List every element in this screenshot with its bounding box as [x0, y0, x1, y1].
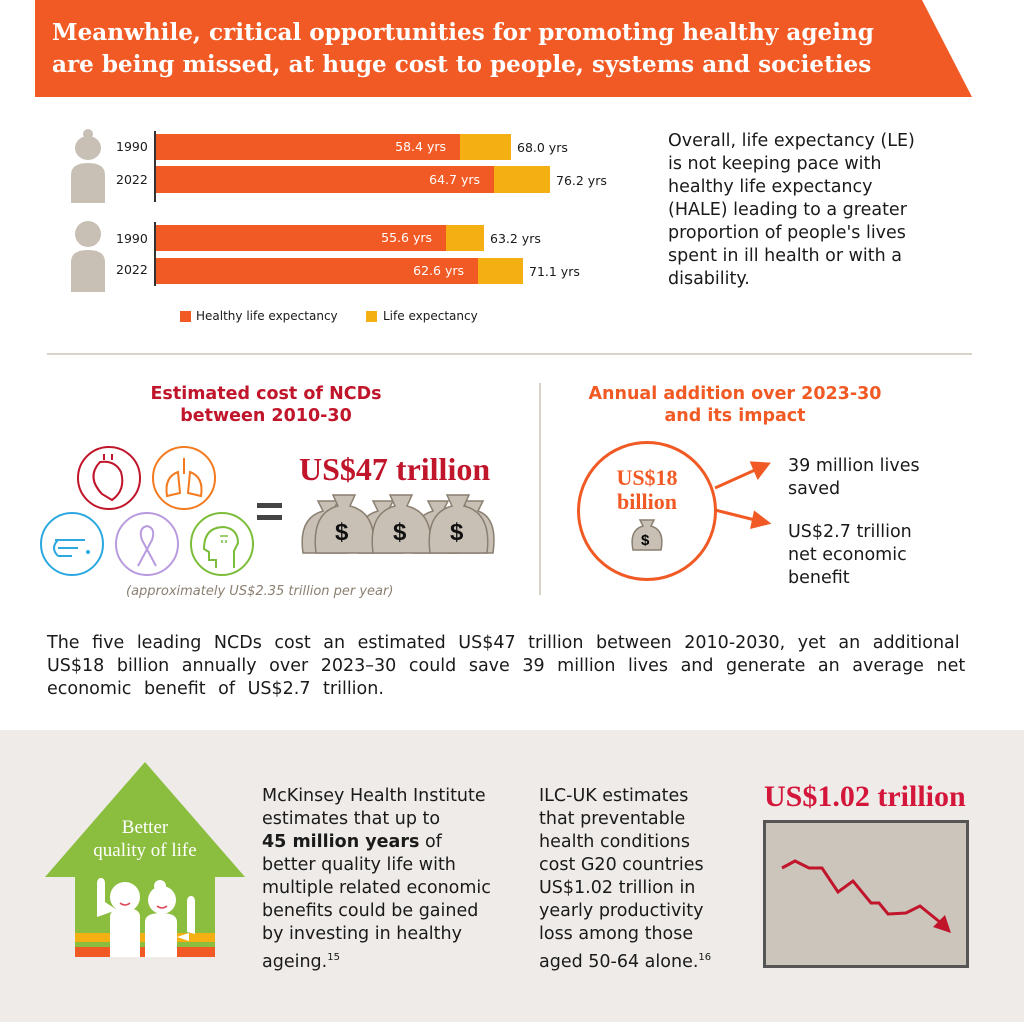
- outcomes text: saved: [788, 479, 840, 499]
- text: McKinsey: better quality life with: [262, 855, 456, 875]
- bar chart: HALE vs LE: 1990: [116, 231, 148, 246]
- text: McKinsey: 45 million years of: [262, 832, 442, 852]
- panel: annual addition: net economic: [788, 545, 907, 565]
- bar chart: HALE vs LE: 68.0 yrs: [517, 140, 568, 155]
- legend: [180, 309, 478, 323]
- text: ILC-UK: ILC-UK estimates: [539, 786, 688, 806]
- icon: money bags: $: [335, 519, 349, 546]
- text: LE vs HALE explanation: (HALE) leading to a greater: [668, 200, 907, 220]
- legend: Life expectancy: [383, 309, 478, 323]
- panel: annual addition: US$2.7 trillion: [788, 522, 912, 542]
- bar chart: HALE vs LE: 1990: [116, 139, 148, 154]
- outcomes text: 39 million lives: [788, 456, 920, 476]
- text: McKinsey: ageing.15: [262, 952, 340, 972]
- text: ILC-UK: yearly productivity: [539, 901, 703, 921]
- bar chart: HALE vs LE: 2022: [116, 172, 148, 187]
- bar chart: HALE vs LE: 71.1 yrs: [529, 264, 580, 279]
- text: ILC-UK: that preventable: [539, 809, 685, 829]
- icon: money bags: $: [450, 519, 464, 546]
- text: McKinsey: benefits could be gained: [262, 901, 478, 921]
- text: LE vs HALE explanation: spent in ill health or with a: [668, 246, 902, 266]
- panel: annual addition: benefit: [788, 568, 850, 588]
- text: McKinsey: by investing in healthy: [262, 924, 462, 944]
- bar chart: HALE vs LE: 2022: [116, 262, 148, 277]
- text: McKinsey: [262, 786, 491, 972]
- circle: US$18 billion: $: [641, 532, 650, 549]
- equals sign: [257, 503, 282, 508]
- text: ILC-UK: [539, 786, 711, 972]
- panel: bottom grey: [0, 730, 1024, 1022]
- text: ILC-UK: aged 50-64 alone.16: [539, 952, 711, 972]
- circle: US$18 billion: [577, 441, 717, 581]
- summary text: US$18 billion annually over 2023–30 could save 39 million lives and generate an average net: [47, 656, 965, 676]
- text: ILC-UK: health conditions: [539, 832, 690, 852]
- summary text: [46, 633, 965, 699]
- heading: Annual addition over 2023-30: [589, 384, 881, 404]
- icon: house better quality of life: quality of life: [93, 840, 197, 861]
- circle: US$18 billion: billion: [617, 489, 677, 514]
- bar chart: HALE vs LE: [71, 129, 607, 323]
- heading: [150, 384, 382, 426]
- heading: and its impact: [664, 406, 806, 426]
- icon: money bags: [301, 494, 495, 554]
- text: LE vs HALE explanation: disability.: [668, 269, 750, 289]
- chart: declining line: [763, 820, 969, 968]
- icon: house better quality of life: Better: [122, 817, 169, 838]
- bar chart: HALE vs LE: 76.2 yrs: [556, 173, 607, 188]
- text: LE vs HALE explanation: is not keeping pace with: [668, 154, 881, 174]
- bar chart: HALE vs LE: 55.6 yrs: [381, 230, 432, 245]
- bar chart: HALE vs LE: 62.6 yrs: [413, 263, 464, 278]
- icon: house better quality of life: [45, 762, 245, 957]
- text: LE vs HALE explanation: healthy life expectancy: [668, 177, 872, 197]
- US$47 trillion: US$47 trillion: [299, 451, 490, 487]
- legend: Healthy life expectancy: [196, 309, 338, 323]
- icon: money bags: $: [393, 519, 407, 546]
- heading: [588, 384, 881, 426]
- summary text: The five leading NCDs cost an estimated US$47 trillion between 2010-2030, yet an additional: [47, 633, 960, 653]
- text: ILC-UK: loss among those: [539, 924, 693, 944]
- icons: five NCDs: [40, 446, 254, 576]
- text: McKinsey: estimates that up to: [262, 809, 440, 829]
- text: McKinsey: multiple related economic: [262, 878, 491, 898]
- text: LE vs HALE explanation: Overall, life expectancy (LE): [668, 131, 915, 151]
- text: LE vs HALE explanation: [668, 131, 915, 289]
- icon: man: [71, 221, 105, 292]
- caption: (approximately US$2.35 trillion per year): [126, 584, 393, 599]
- text: LE vs HALE explanation: proportion of people's lives: [668, 223, 906, 243]
- heading: between 2010-30: [180, 406, 352, 426]
- heading: Estimated cost of NCDs: [150, 384, 382, 404]
- panel: annual addition: [577, 384, 920, 588]
- text: ILC-UK: US$1.02 trillion in: [539, 878, 695, 898]
- bar chart: HALE vs LE: 58.4 yrs: [395, 139, 446, 154]
- US$1.02 trillion heading: US$1.02 trillion: [764, 780, 966, 813]
- outcomes text: [788, 456, 920, 499]
- bar chart: HALE vs LE: 63.2 yrs: [490, 231, 541, 246]
- header banner: [35, 0, 972, 97]
- title: [52, 19, 874, 78]
- arrows: [714, 461, 772, 529]
- text: McKinsey: McKinsey Health Institute: [262, 786, 486, 806]
- circle: US$18 billion: US$18: [616, 465, 678, 490]
- bar chart: HALE vs LE: 64.7 yrs: [429, 172, 480, 187]
- icon: woman: [71, 129, 105, 203]
- summary text: economic benefit of US$2.7 trillion.: [47, 679, 384, 699]
- panel: NCD cost: [40, 384, 495, 599]
- title: are being missed, at huge cost to people, systems and societies: [52, 51, 871, 78]
- title: Meanwhile, critical opportunities for promoting healthy ageing: [52, 19, 874, 46]
- text: ILC-UK: cost G20 countries: [539, 855, 704, 875]
